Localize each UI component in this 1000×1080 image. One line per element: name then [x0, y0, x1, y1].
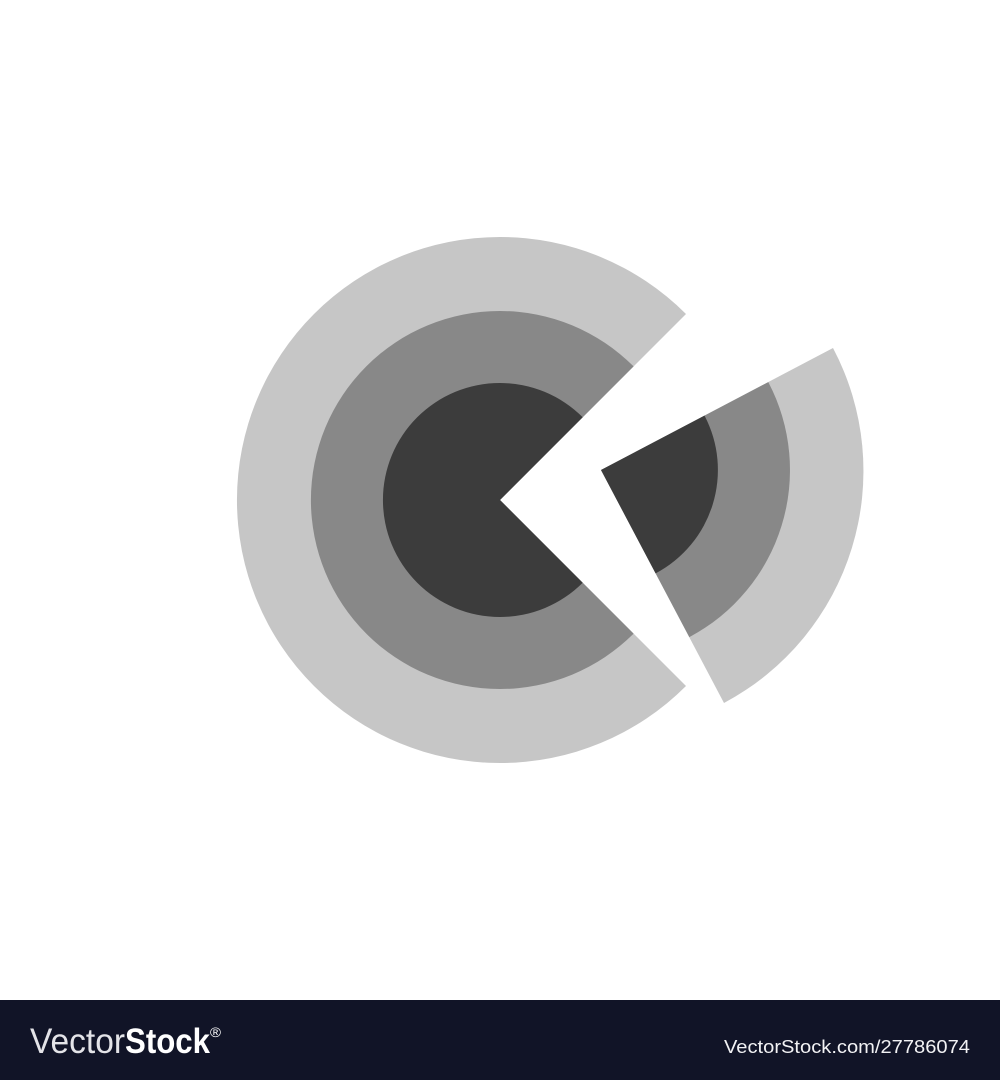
footer bar — [0, 1000, 1000, 1080]
footer logo: VectorStock: Stock — [125, 1022, 210, 1061]
large pie with wedge removed — [237, 237, 686, 763]
detached pie slice — [601, 348, 863, 703]
slice middle ring: mid grey — [601, 382, 790, 637]
slice outer ring: light grey — [601, 348, 863, 703]
footer logo: VectorStock: Vector — [30, 1022, 125, 1061]
footer logo: VectorStock — [30, 1022, 222, 1061]
outer ring: light grey — [237, 237, 686, 763]
middle ring: mid grey — [311, 311, 634, 689]
footer logo: VectorStock: ® — [210, 1024, 222, 1040]
slice inner core: dark grey — [601, 416, 718, 573]
inner core: dark grey — [383, 383, 583, 617]
footer image reference: VectorStock.com/27786074 — [724, 1036, 970, 1057]
